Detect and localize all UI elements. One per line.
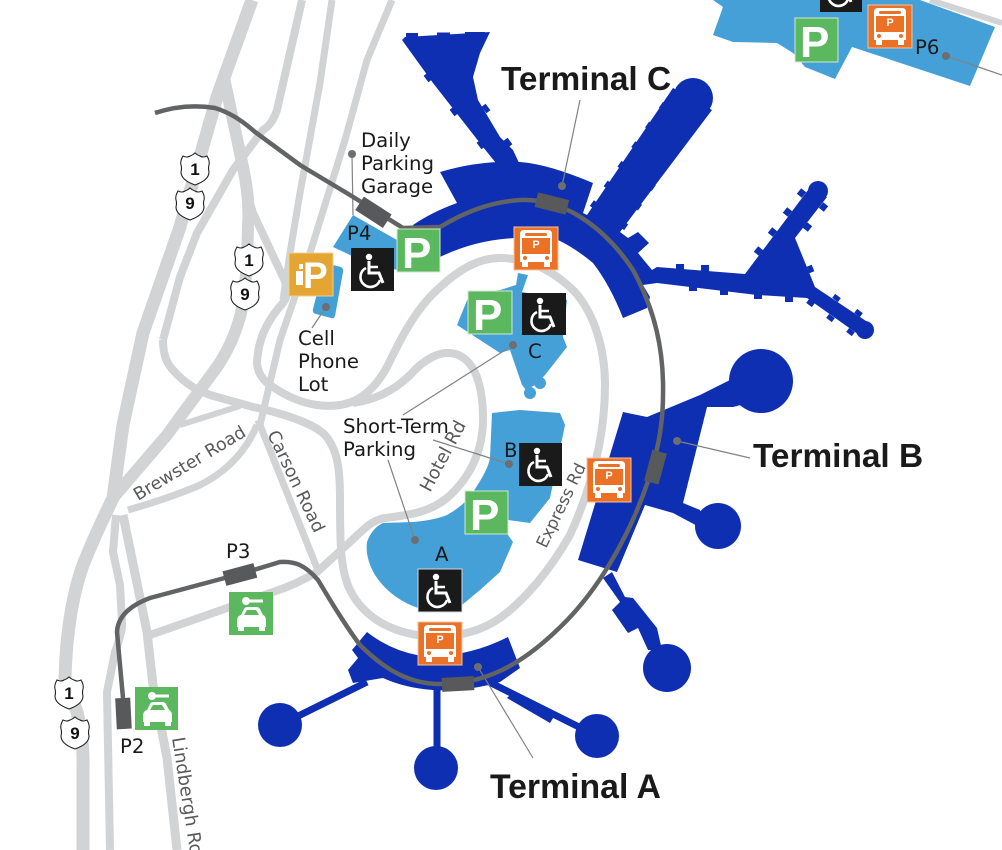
terminal B: [578, 349, 793, 692]
icon: terminal C shuttle: [514, 227, 558, 270]
route shields lower: [55, 677, 89, 749]
icon: P6 parking: [795, 18, 838, 67]
route shields middle: [231, 244, 263, 310]
icon: lot C wheelchair: [522, 293, 566, 335]
icon: cell phone lot: [289, 253, 333, 296]
label: Daily Parking Garage: Parking: [361, 152, 434, 175]
road label: Hotel Rd: Hotel Rd: [416, 417, 471, 495]
road label: Express Rd: Express Rd: [533, 460, 590, 551]
icon: P6 shuttle: P: [886, 17, 894, 29]
label: P6: P6: [915, 36, 939, 59]
icon: lot A/B parking: P: [470, 491, 499, 540]
route shields upper: [176, 153, 209, 220]
label: Daily Parking Garage: Garage: [361, 175, 433, 198]
monorail stations: [115, 192, 667, 729]
route shields upper: 1: [190, 160, 200, 179]
icon: lot B wheelchair: [519, 443, 562, 486]
icon: terminal A shuttle: P: [436, 634, 444, 646]
icon: lot A wheelchair: [418, 569, 462, 612]
route shields middle: 9: [240, 285, 250, 304]
icon: P6 wheelchair: [820, 0, 862, 12]
label: P3: P3: [226, 540, 250, 563]
parking lot P4: [333, 215, 397, 270]
icon: P4 wheelchair: [351, 248, 394, 291]
route shields lower: 9: [70, 724, 80, 743]
label: Short-Term Parking: Short-Term: [343, 415, 449, 438]
label: Cell Phone Lot: Lot: [298, 373, 329, 396]
cell phone lot: [313, 265, 343, 318]
leader lines and dots: [312, 52, 1002, 758]
icon: P6 parking: P: [800, 18, 829, 67]
icon: garage parking: P: [402, 229, 431, 278]
icon: lot C parking: P: [473, 291, 502, 340]
icon: lot A/B parking: [465, 491, 508, 540]
icon: P6 shuttle: [868, 5, 912, 48]
label: Short-Term Parking: Parking: [343, 438, 416, 461]
icon: P3 rental car: [229, 592, 273, 635]
title: Terminal A: Terminal A: [490, 768, 661, 806]
icon: lot C parking: [468, 291, 512, 340]
label: lot C: C: [528, 340, 542, 363]
label: lot B: B: [504, 439, 518, 462]
icon: terminal B shuttle: [587, 458, 631, 502]
icon: terminal A shuttle: [418, 622, 462, 665]
label: Daily Parking Garage: Daily: [361, 129, 411, 152]
parking lot P6: [713, 0, 995, 86]
icon: terminal B shuttle: P: [605, 470, 613, 482]
parking lots A and B: [367, 410, 565, 608]
label: Cell Phone Lot: Cell: [298, 327, 335, 350]
label: P4: P4: [347, 222, 371, 245]
road label: Carson Road: Carson Road: [262, 428, 328, 536]
road label: Brewster Road: Brewster Road: [130, 423, 250, 505]
icon: garage parking: [397, 229, 440, 278]
route shields upper: 9: [185, 194, 195, 213]
label: lot A: A: [435, 543, 449, 566]
terminal A: [258, 632, 619, 790]
label: P2: P2: [120, 735, 144, 758]
icon: P2 rental car: [135, 687, 178, 730]
monorail line: [117, 106, 663, 698]
title: Terminal B: Terminal B: [753, 438, 923, 475]
terminal C: [402, 32, 874, 339]
route shields lower: 1: [64, 684, 74, 703]
icon: cell phone lot: P: [303, 255, 328, 296]
route shields middle: 1: [244, 251, 254, 270]
parking lot C: [457, 273, 567, 399]
label: Cell Phone Lot: Phone: [298, 350, 359, 373]
icon: terminal C shuttle: P: [532, 239, 540, 251]
title: Terminal C: Terminal C: [501, 61, 671, 98]
